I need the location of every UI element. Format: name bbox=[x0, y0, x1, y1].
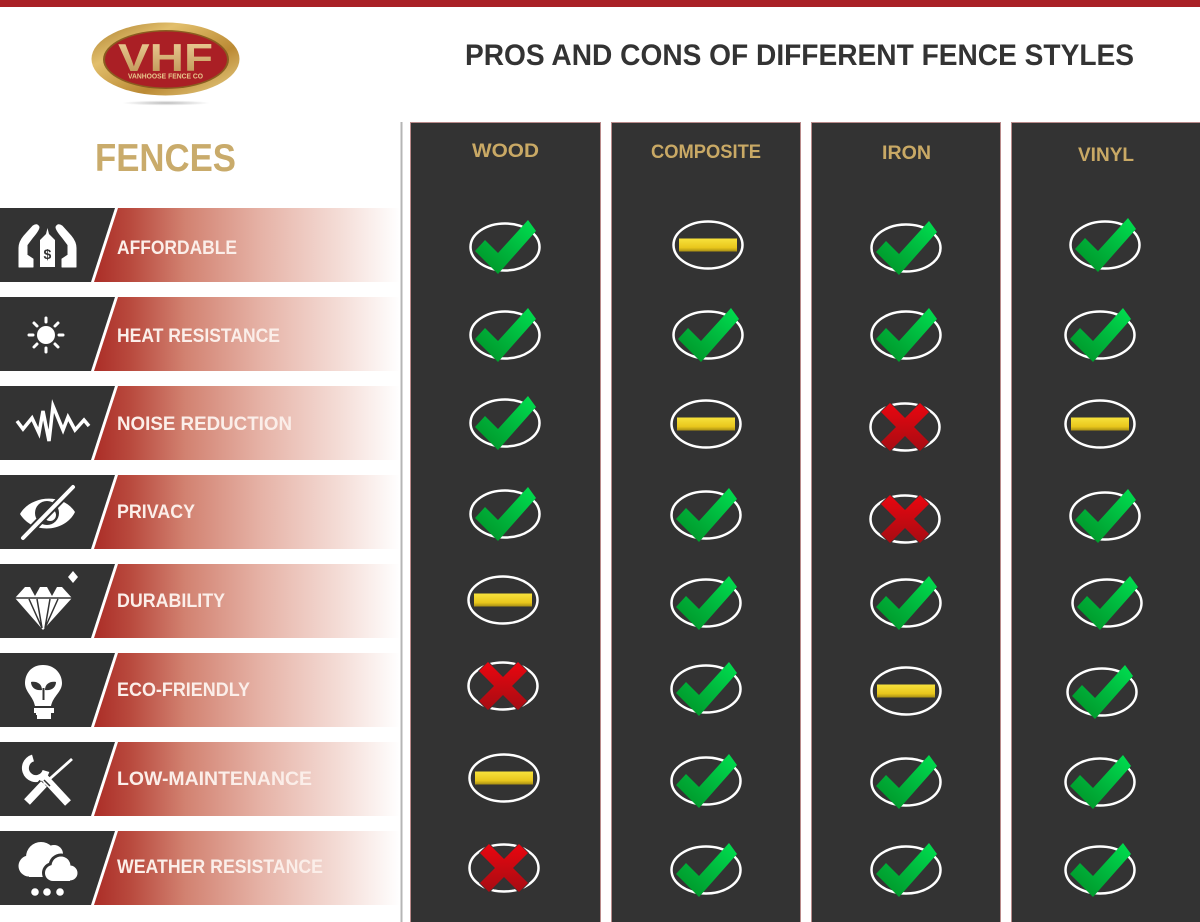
heading: fences: FENCES bbox=[95, 137, 236, 180]
icon: hands holding price tag: $ bbox=[44, 246, 52, 262]
mark: eco-friendly yes bbox=[672, 662, 740, 716]
label: AFFORDABLE bbox=[117, 238, 237, 259]
mark: eco-friendly neutral bbox=[872, 668, 940, 714]
label: DURABILITY bbox=[117, 591, 225, 612]
mark: affordable yes bbox=[470, 220, 540, 274]
logo: VHF Vanhoose Fence Co bbox=[92, 22, 240, 106]
mark: noise reduction neutral bbox=[672, 400, 740, 448]
mark: eco-friendly yes bbox=[1068, 665, 1136, 719]
title: PROS AND CONS OF DIFFERENT FENCE STYLES bbox=[465, 39, 1134, 72]
heading: vinyl: VINYL bbox=[1078, 145, 1134, 166]
icon: sound wave bbox=[17, 406, 89, 441]
mark: heat resistance yes bbox=[1066, 308, 1134, 362]
mark: heat resistance yes bbox=[674, 308, 742, 362]
heading: wood: WOOD bbox=[472, 141, 539, 162]
icon: crossed-out eye bbox=[20, 487, 75, 538]
mark: affordable yes bbox=[1070, 218, 1140, 272]
mark: low-maintenance yes bbox=[672, 754, 740, 808]
mark: privacy no bbox=[870, 495, 940, 543]
panel: composite bbox=[612, 122, 800, 922]
row: privacy bbox=[0, 475, 400, 549]
label: ECO-FRIENDLY bbox=[117, 680, 250, 701]
mark: weather resistance yes bbox=[872, 843, 940, 897]
mark: weather resistance yes bbox=[672, 843, 740, 897]
heading: iron: IRON bbox=[882, 143, 931, 164]
icon: hands holding price tag bbox=[19, 225, 76, 267]
panel: iron bbox=[812, 122, 1000, 922]
row: heat resistance bbox=[0, 297, 400, 371]
mark: noise reduction yes bbox=[470, 396, 540, 450]
panel: vinyl bbox=[1012, 122, 1200, 922]
mark: low-maintenance neutral bbox=[470, 754, 538, 802]
row: low-maintenance bbox=[0, 742, 400, 816]
mark: durability yes bbox=[1072, 576, 1142, 630]
mark: privacy yes bbox=[672, 488, 740, 542]
heading: composite: COMPOSITE bbox=[651, 142, 761, 163]
mark: noise reduction no bbox=[870, 403, 940, 451]
logo: VHF Vanhoose Fence Co: VANHOOSE FENCE CO bbox=[128, 74, 204, 80]
logo: VHF Vanhoose Fence Co: VHF bbox=[118, 37, 213, 80]
row: weather resistance bbox=[0, 831, 400, 905]
icon: sun bbox=[29, 318, 63, 352]
mark: durability yes bbox=[672, 576, 740, 630]
mark: privacy yes bbox=[470, 487, 540, 541]
mark: heat resistance yes bbox=[872, 308, 940, 362]
mark: weather resistance no bbox=[470, 844, 538, 892]
mark: noise reduction neutral bbox=[1066, 400, 1134, 448]
label: PRIVACY bbox=[117, 502, 195, 523]
mark: low-maintenance yes bbox=[1066, 755, 1134, 809]
panel: wood bbox=[410, 122, 600, 922]
label: NOISE REDUCTION bbox=[117, 414, 292, 435]
mark: affordable neutral bbox=[674, 222, 742, 268]
mark: durability neutral bbox=[468, 576, 538, 624]
mark: low-maintenance yes bbox=[872, 755, 940, 809]
mark: heat resistance yes bbox=[470, 308, 540, 362]
icon: wrench and screwdriver bbox=[25, 758, 72, 803]
label: WEATHER RESISTANCE bbox=[117, 857, 323, 878]
row: durability bbox=[0, 564, 400, 638]
mark: weather resistance yes bbox=[1066, 843, 1134, 897]
mark: privacy yes bbox=[1070, 489, 1140, 543]
row: affordable bbox=[0, 208, 400, 282]
top red band bbox=[0, 0, 1200, 7]
row: noise reduction bbox=[0, 386, 400, 460]
mark: affordable yes bbox=[872, 221, 940, 275]
icon: diamond bbox=[15, 571, 78, 630]
mark: eco-friendly no bbox=[468, 662, 538, 710]
icon: rain clouds bbox=[18, 842, 80, 896]
row: eco-friendly bbox=[0, 653, 400, 727]
label: HEAT RESISTANCE bbox=[117, 326, 280, 347]
mark: durability yes bbox=[872, 576, 940, 630]
vertical divider bbox=[400, 122, 402, 922]
icon: eco light bulb bbox=[25, 665, 62, 719]
label: LOW-MAINTENANCE bbox=[117, 769, 312, 790]
